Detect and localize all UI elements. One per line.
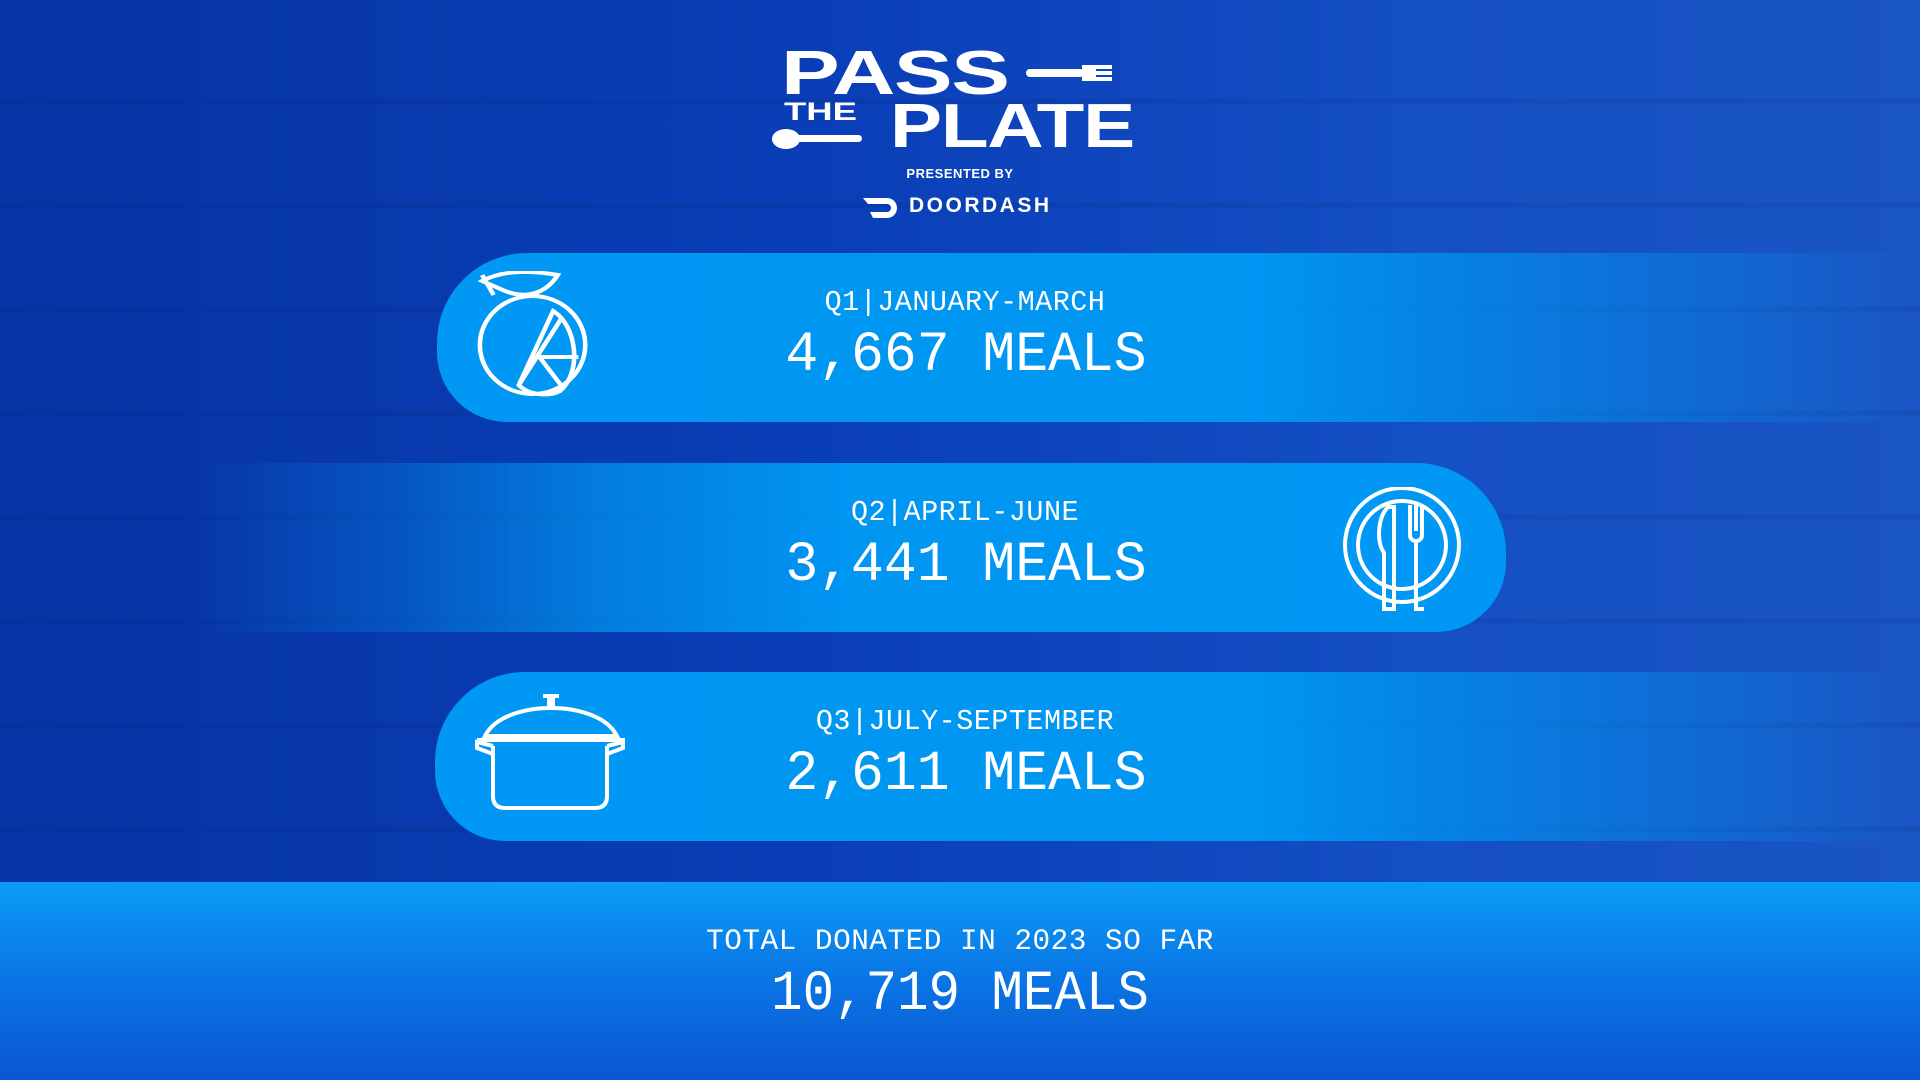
Q3 label: Q3|JULY-SEPTEMBER	[816, 705, 1114, 738]
icon: pot	[475, 694, 625, 810]
total label: TOTAL DONATED IN 2023 SO FAR	[706, 925, 1214, 959]
Q3 meals: 2,611 MEALS	[785, 743, 1147, 807]
doordash logo: DOORDASH	[909, 194, 1052, 217]
panel: total	[0, 882, 1920, 1080]
Q2 meals: 3,441 MEALS	[785, 534, 1147, 598]
title: pass the plate: PASS	[781, 39, 1009, 108]
presented by: PRESENTED BY	[906, 166, 1014, 181]
logo	[772, 39, 1134, 218]
title: pass the plate	[772, 39, 1134, 161]
icon: plate with cutlery	[1343, 487, 1461, 611]
Q2 label: Q2|APRIL-JUNE	[851, 496, 1079, 529]
panel: Q2	[200, 463, 1506, 632]
icon: orange	[478, 271, 588, 396]
title: pass the plate: THE	[784, 98, 857, 126]
panel: Q3	[435, 672, 1920, 841]
Q1 label: Q1|JANUARY-MARCH	[825, 286, 1105, 319]
title: pass the plate: PLATE	[890, 92, 1134, 161]
panel: Q1	[437, 253, 1920, 422]
total meals: 10,719 MEALS	[771, 963, 1149, 1027]
Q1 meals: 4,667 MEALS	[785, 324, 1147, 388]
